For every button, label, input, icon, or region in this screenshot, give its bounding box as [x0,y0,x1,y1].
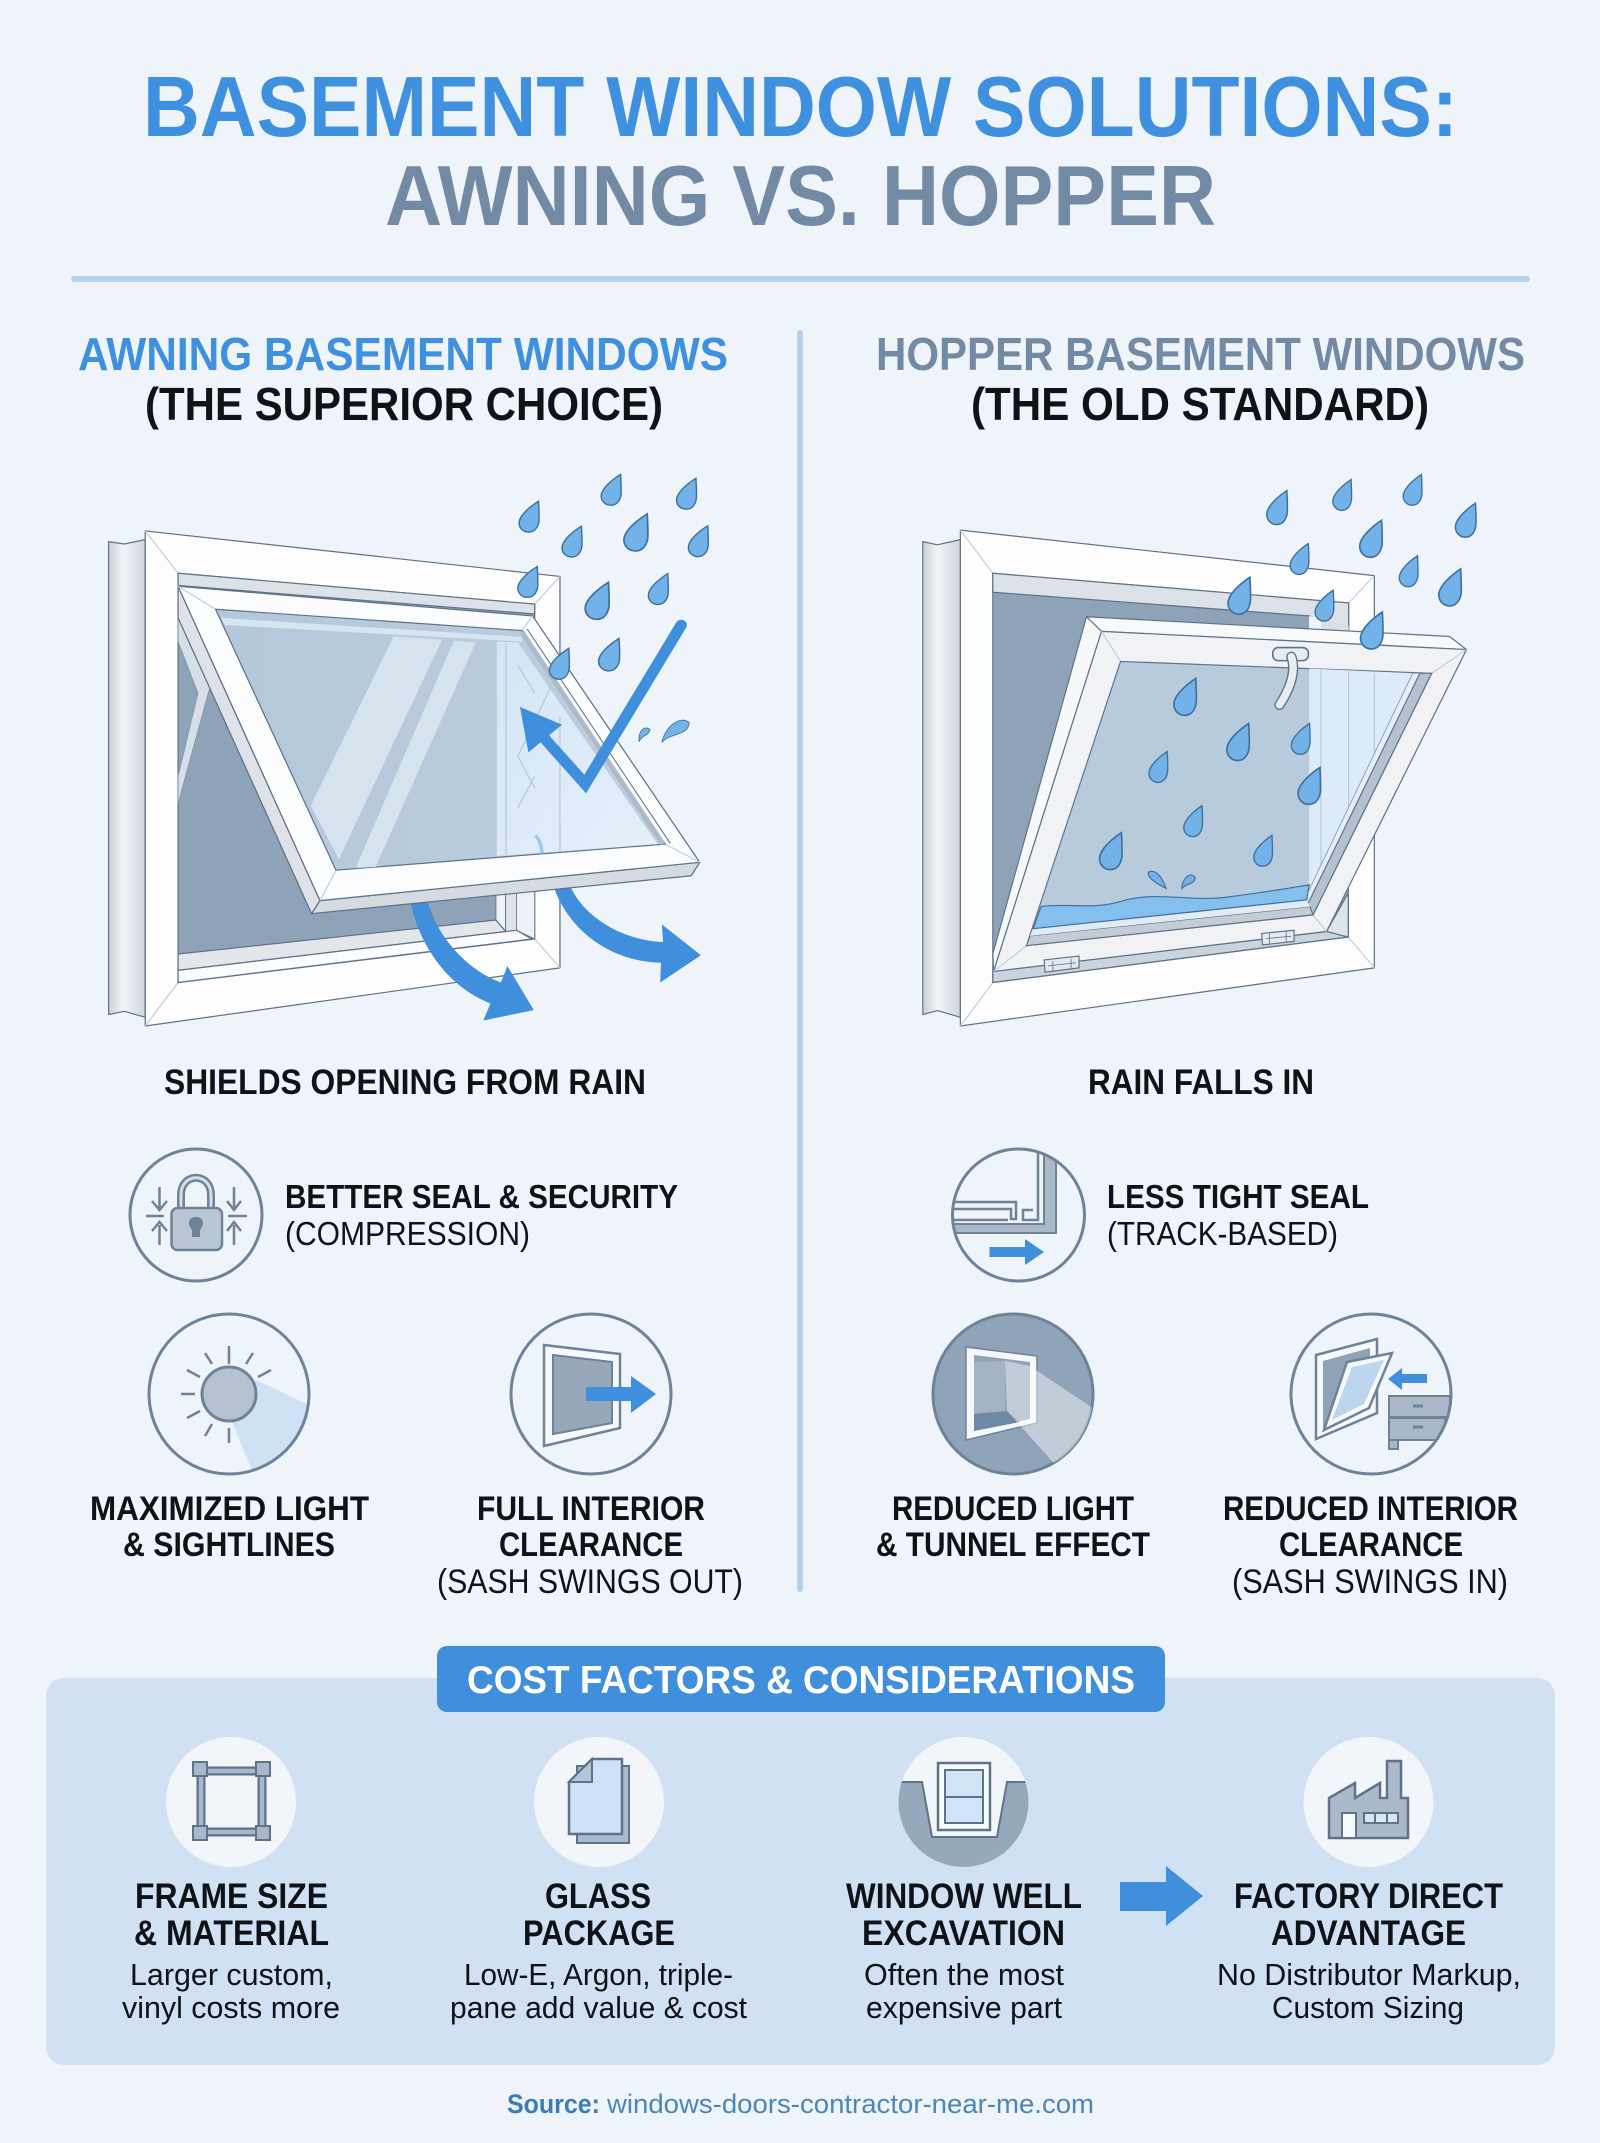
text: reduced light: & TUNNEL EFFECT [876,1526,1150,1564]
text: full clearance: (SASH SWINGS OUT) [437,1563,743,1601]
caption: hopper: RAIN FALLS IN [1088,1063,1314,1102]
title: AWNING VS. HOPPER [385,149,1216,244]
panel: cost factors [46,1646,1555,2065]
illustration: awning window [109,474,708,1026]
text: reduced clearance: CLEARANCE [1279,1526,1463,1564]
text: frame size: Larger custom, [130,1957,333,1992]
text: factory direct: Custom Sizing [1272,1990,1464,2025]
raindrops [518,474,708,742]
text: better seal: (COMPRESSION) [285,1215,530,1252]
hinges [1044,930,1294,972]
text: glass package [450,1877,747,2025]
text: factory direct: FACTORY DIRECT [1234,1877,1503,1916]
icon: frame [166,1737,296,1867]
icon: lock compression [130,1149,262,1281]
text: better seal [285,1178,678,1252]
sill and jamb [178,875,535,982]
raindrops [1100,474,1476,888]
arrow: rain deflection [520,625,681,784]
heading: awning: (THE SUPERIOR CHOICE) [145,378,663,430]
badge: cost factors heading: COST FACTORS & CONSIDERATIONS [467,1659,1135,1702]
text: frame size: vinyl costs more [122,1990,340,2025]
text: window well: expensive part [866,1990,1062,2025]
icon: reduced clearance [1291,1314,1451,1474]
text: factory direct: ADVANTAGE [1271,1914,1466,1953]
caption: awning: SHIELDS OPENING FROM RAIN [164,1063,646,1102]
heading: hopper: HOPPER BASEMENT WINDOWS [876,328,1525,380]
text: reduced clearance: REDUCED INTERIOR [1223,1490,1518,1528]
arrow: runoff right [554,887,701,982]
text: frame size [122,1877,340,2025]
bottom track [993,893,1348,982]
text: reduced clearance: (SASH SWINGS IN) [1232,1563,1508,1601]
icon: glass [534,1737,664,1867]
text: full clearance: FULL INTERIOR [477,1490,705,1528]
text: factory direct: No Distributor Markup, [1217,1957,1521,1992]
text: reduced light [876,1490,1150,1564]
text: full clearance [437,1490,743,1601]
text: factory direct [1217,1877,1521,2025]
source: Source: [507,2089,600,2119]
text: glass package: pane add value & cost [450,1990,747,2025]
handle [1273,648,1308,705]
text: frame size: FRAME SIZE [135,1877,328,1916]
source: windows-doors-contractor-near-me.com [606,2089,1094,2119]
icon: factory [1304,1737,1434,1867]
text: less tight seal: (TRACK-BASED) [1107,1215,1338,1252]
text: less tight seal: LESS TIGHT SEAL [1107,1178,1369,1215]
heading: awning [78,328,728,430]
icon: reduced light [933,1314,1100,1474]
text: maximized light [90,1490,369,1564]
water pooling [1033,885,1309,929]
text: glass package: PACKAGE [523,1914,675,1953]
text: window well: EXCAVATION [862,1914,1065,1953]
icon: window well [895,1737,1035,1870]
text: window well [846,1877,1082,2025]
text: maximized light: MAXIMIZED LIGHT [90,1490,369,1528]
text: better seal: BETTER SEAL & SECURITY [285,1178,678,1215]
icon: maximized light [149,1314,320,1480]
text: reduced light: REDUCED LIGHT [892,1490,1134,1528]
arrow: runoff left [410,901,534,1020]
illustration: hopper window [923,474,1476,1026]
sash [993,617,1466,971]
heading: hopper: (THE OLD STANDARD) [971,378,1429,430]
text: reduced clearance [1223,1490,1518,1601]
title [143,60,1458,244]
text: less tight seal [1107,1178,1369,1252]
arrow: to factory [1120,1866,1203,1926]
text: glass package: Low-E, Argon, triple- [464,1957,733,1992]
title: BASEMENT WINDOW SOLUTIONS: [143,60,1458,155]
text: maximized light: & SIGHTLINES [123,1526,335,1564]
text: window well: WINDOW WELL [846,1877,1082,1916]
text: window well: Often the most [864,1957,1064,1992]
badge: cost factors heading [437,1646,1165,1712]
icon: full clearance [511,1314,671,1474]
icon: track seal [945,1145,1084,1281]
heading: awning: AWNING BASEMENT WINDOWS [78,328,728,380]
heading: hopper [876,328,1525,430]
text: full clearance: CLEARANCE [499,1526,683,1564]
text: frame size: & MATERIAL [134,1914,329,1953]
text: glass package: GLASS [545,1877,651,1916]
